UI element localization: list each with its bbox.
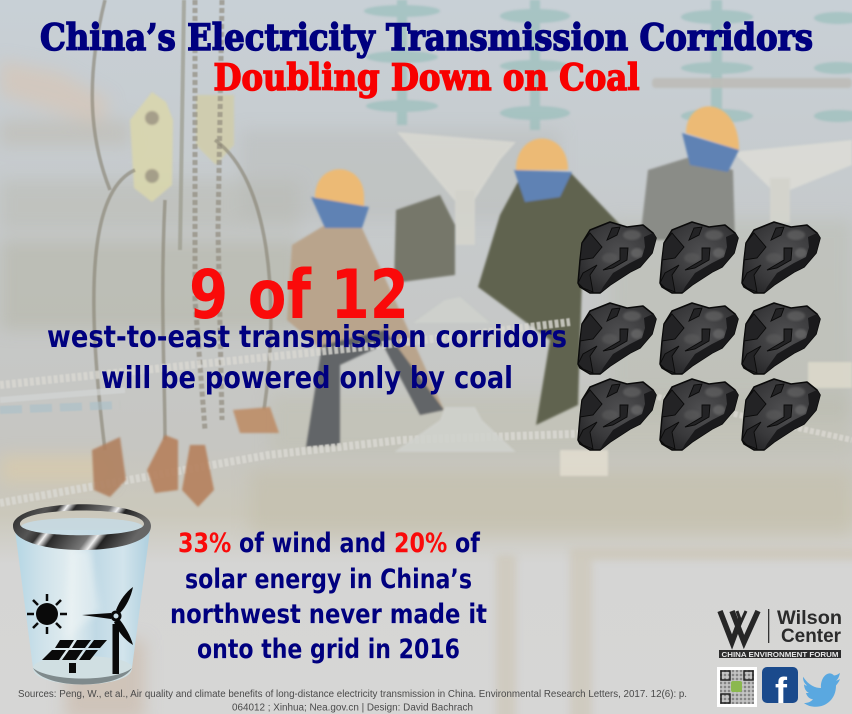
sources: Sources: Peng, W., et al., Air quality and climate benefits of long-distance electricity transmission in China. Environmental Research Letters, 2017. 12(6): p. xyxy=(18,689,687,700)
logo: Wilson Center: CHINA ENVIRONMENT FORUM xyxy=(722,652,839,659)
icon: Facebook xyxy=(762,667,798,711)
water dikes xyxy=(496,548,852,714)
logo mark: W xyxy=(720,611,758,642)
chains and cables xyxy=(0,0,852,503)
curtailment statement xyxy=(170,528,487,665)
sources xyxy=(18,689,687,714)
logo: Wilson Center: Center xyxy=(781,626,842,647)
icon: sun xyxy=(27,594,67,634)
curtailment statement: solar energy in China’s xyxy=(185,564,472,595)
icon: wind turbine xyxy=(82,587,133,674)
curtailment statement: 33% of wind and 20% of xyxy=(178,528,480,559)
lower scene xyxy=(92,297,852,507)
icon: Twitter bird xyxy=(803,673,840,707)
curtailment statement: northwest never made it xyxy=(170,599,487,630)
big number: 9 of 12: 9 of 12 xyxy=(189,256,409,335)
curtailment statement: onto the grid in 2016 xyxy=(197,634,460,665)
sources: 064012 ; Xinhua; Nea.gov.cn | Design: David Bachrach xyxy=(232,702,473,714)
coal statement: will be powered only by coal xyxy=(101,361,513,396)
icon: WeChat QR code xyxy=(717,667,757,707)
hardware xyxy=(130,78,852,245)
icon: trash can with renewable energy xyxy=(13,504,151,684)
logo: Wilson Center: Wilson xyxy=(777,608,842,629)
workers xyxy=(287,106,739,447)
icon: Facebook: f xyxy=(775,670,788,711)
coal statement xyxy=(47,320,567,396)
insulators xyxy=(364,0,852,130)
subtitle: Doubling Down on Coal xyxy=(214,57,640,99)
logo: Wilson Center xyxy=(719,608,842,659)
coal statement: west-to-east transmission corridors xyxy=(47,320,567,355)
icon: solar panel xyxy=(42,640,107,673)
coal icon grid: 9 of 12 xyxy=(578,222,820,450)
